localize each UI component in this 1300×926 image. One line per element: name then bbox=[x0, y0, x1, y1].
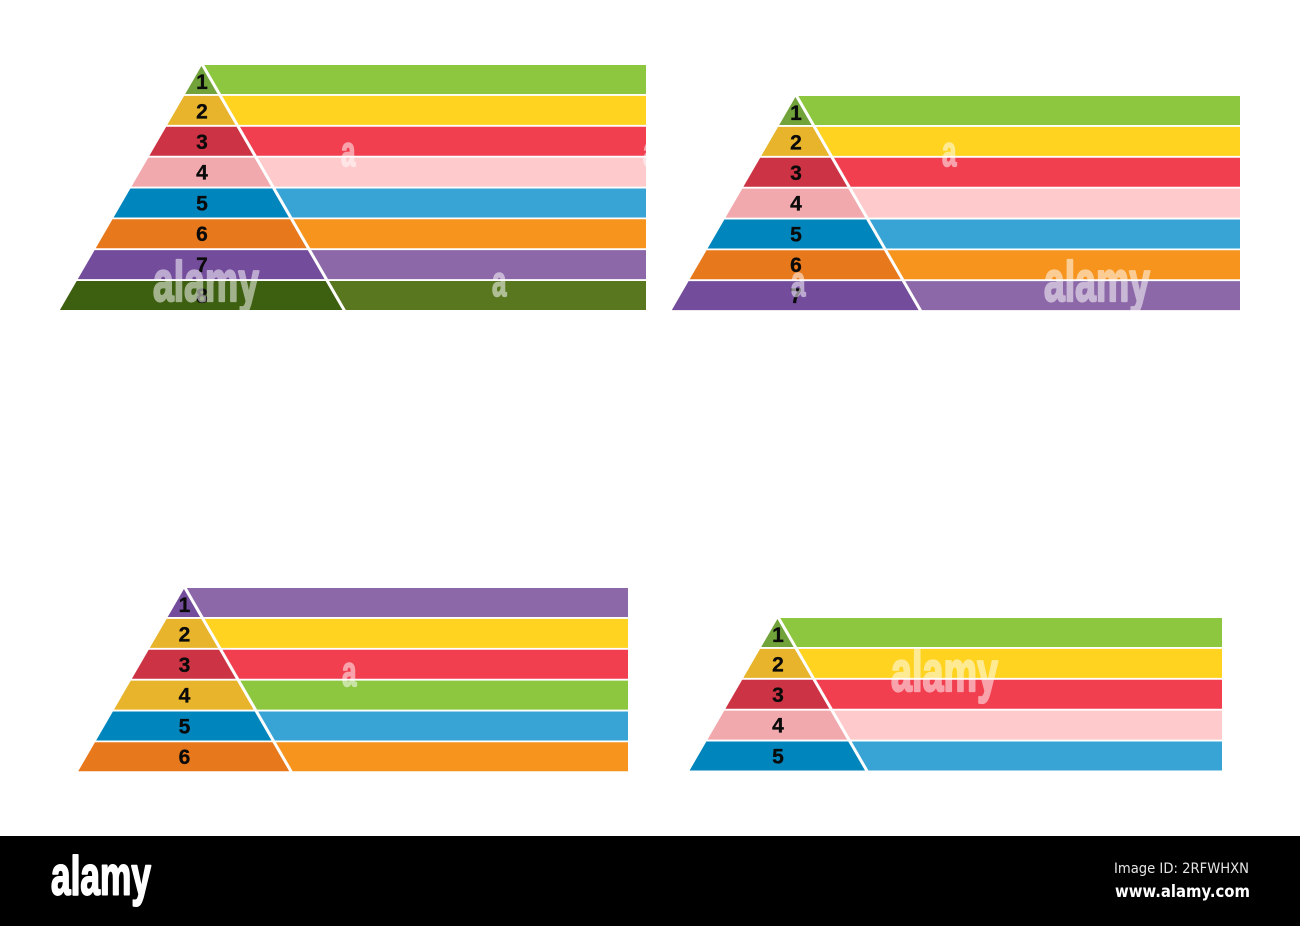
level 4 bbox=[726, 189, 1240, 218]
watermarks: alamy bbox=[891, 640, 998, 704]
level 2 bbox=[743, 649, 1222, 678]
footer logo: alamy bbox=[51, 844, 151, 906]
level 5 bbox=[114, 188, 646, 217]
level 4: 4 bbox=[196, 162, 208, 184]
watermarks: alamy bbox=[153, 250, 259, 314]
level 4: 4 bbox=[179, 684, 191, 708]
watermarks bbox=[153, 128, 1150, 704]
level 6 bbox=[96, 219, 646, 248]
level 5: 5 bbox=[790, 224, 802, 246]
level 1 bbox=[779, 96, 1240, 125]
watermarks: a bbox=[341, 128, 356, 176]
level 2 bbox=[150, 619, 628, 648]
level 1: 1 bbox=[196, 71, 208, 94]
level 2 bbox=[761, 127, 1240, 156]
level 4 bbox=[708, 711, 1222, 740]
level 3: 3 bbox=[196, 131, 208, 154]
level 1: 1 bbox=[179, 594, 191, 617]
level 6 bbox=[78, 742, 628, 771]
level 6: 6 bbox=[196, 223, 208, 246]
level 1 bbox=[168, 588, 628, 617]
level 7 bbox=[78, 250, 646, 279]
level 1 bbox=[761, 618, 1222, 647]
image id: Image ID: 2RFWHXN bbox=[1114, 861, 1249, 877]
level 4: 4 bbox=[772, 714, 784, 738]
level 3: 3 bbox=[772, 684, 784, 707]
level 1: 1 bbox=[790, 102, 802, 125]
level 7: 7 bbox=[196, 254, 208, 277]
level 5 bbox=[708, 219, 1240, 248]
level 5 bbox=[690, 741, 1222, 770]
watermarks: a bbox=[643, 128, 658, 176]
level 5: 5 bbox=[772, 746, 784, 768]
watermarks: a bbox=[791, 258, 806, 306]
level 3: 3 bbox=[790, 162, 802, 185]
level 2: 2 bbox=[790, 132, 802, 154]
watermarks: a bbox=[342, 648, 357, 696]
level 6 bbox=[690, 250, 1240, 279]
level 3 bbox=[743, 158, 1240, 187]
level 4 bbox=[114, 681, 628, 710]
level 3 bbox=[149, 127, 646, 156]
level 8 bbox=[60, 281, 646, 310]
level 7 bbox=[672, 281, 1240, 310]
pyramid chart: seven levels bbox=[672, 95, 1240, 311]
pyramid chart: five levels bbox=[690, 617, 1222, 771]
footer band bbox=[0, 836, 1300, 926]
level 2: 2 bbox=[772, 654, 784, 676]
level 3 bbox=[132, 650, 628, 679]
level 5: 5 bbox=[196, 192, 208, 216]
level 4: 4 bbox=[790, 192, 802, 216]
level 8: 8 bbox=[196, 285, 208, 308]
level 1 bbox=[185, 65, 646, 94]
level 7: 7 bbox=[790, 285, 802, 308]
level 5 bbox=[96, 711, 628, 740]
pyramid chart: six levels bbox=[78, 587, 628, 772]
watermarks: a bbox=[492, 258, 507, 306]
watermarks: alamy bbox=[1044, 250, 1150, 314]
level 1: 1 bbox=[772, 624, 784, 647]
watermarks: a bbox=[942, 128, 957, 176]
level 3 bbox=[725, 680, 1222, 709]
level 2: 2 bbox=[196, 100, 208, 124]
level 5: 5 bbox=[179, 716, 191, 738]
pyramid chart: eight levels bbox=[60, 64, 646, 311]
level 2: 2 bbox=[179, 624, 190, 646]
level 4 bbox=[132, 158, 646, 187]
level 2 bbox=[167, 96, 646, 125]
level 6: 6 bbox=[790, 254, 802, 277]
level 6: 6 bbox=[179, 746, 190, 769]
level 3: 3 bbox=[179, 654, 190, 677]
website: www.alamy.com bbox=[1115, 882, 1250, 901]
